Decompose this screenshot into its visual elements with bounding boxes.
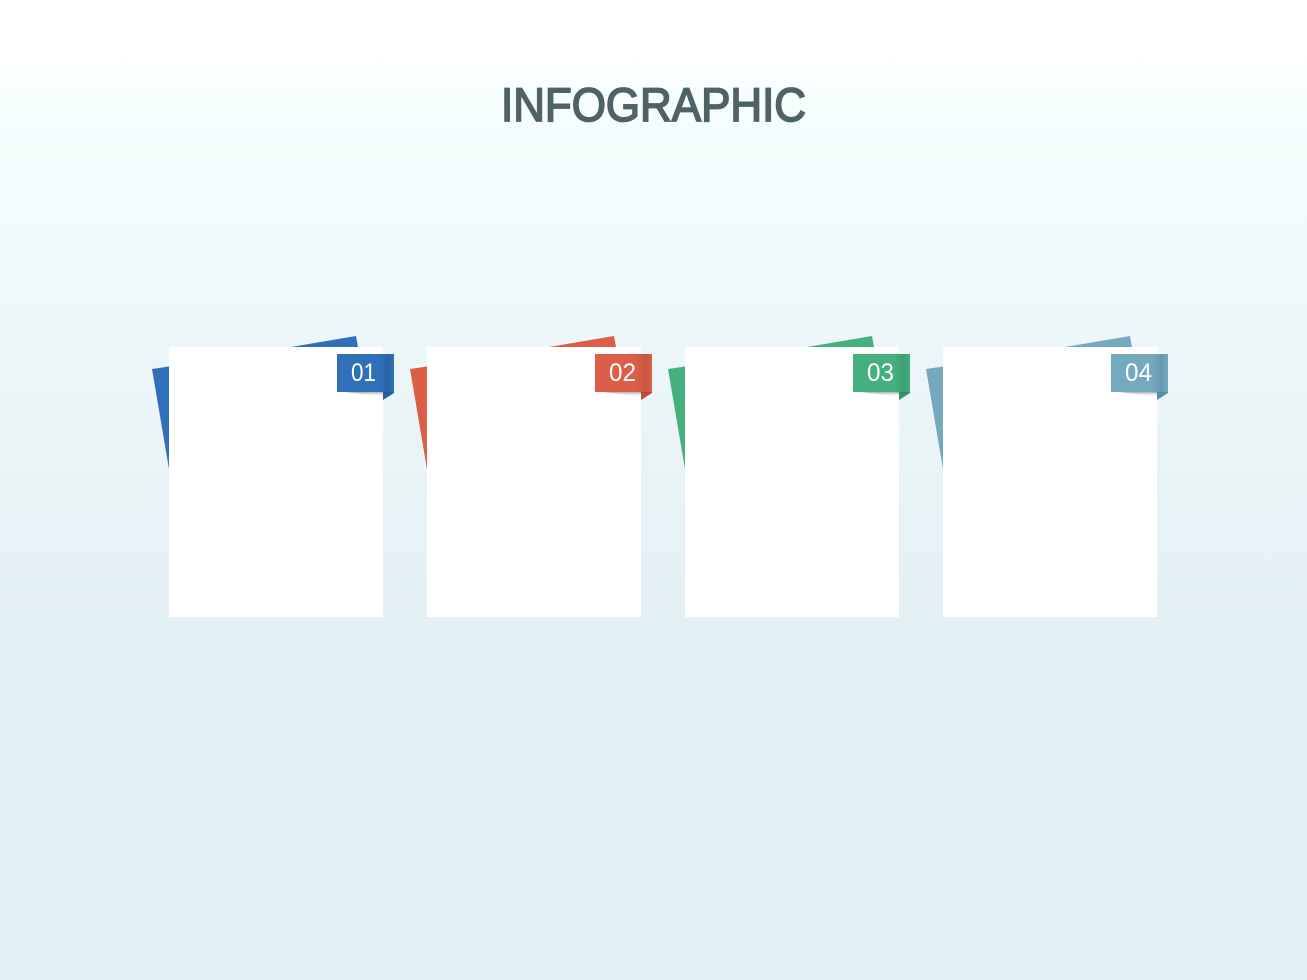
- white card: [685, 347, 899, 617]
- back sheet: green: [668, 336, 874, 469]
- ribbon badge 04: [1111, 354, 1168, 400]
- title: INFOGRAPHIC: [501, 78, 806, 131]
- ribbon badge 01: [337, 354, 394, 400]
- ribbon badge 03: [853, 354, 910, 400]
- ribbon badge 03: 03: [867, 359, 894, 387]
- white card: [943, 347, 1157, 617]
- ribbon badge 02: [595, 354, 652, 400]
- back sheet: red: [410, 336, 616, 469]
- panel: card 03: [668, 336, 910, 617]
- panel: card 04: [926, 336, 1168, 617]
- back sheet: teal: [926, 336, 1132, 469]
- ribbon badge 01: 01: [351, 359, 376, 387]
- panel: card 01: [152, 336, 394, 617]
- panel: card 02: [410, 336, 652, 617]
- white card: [427, 347, 641, 617]
- ribbon badge 02: 02: [609, 359, 636, 387]
- ribbon badge 04: 04: [1125, 359, 1152, 387]
- white card: [169, 347, 383, 617]
- back sheet: blue: [152, 336, 358, 469]
